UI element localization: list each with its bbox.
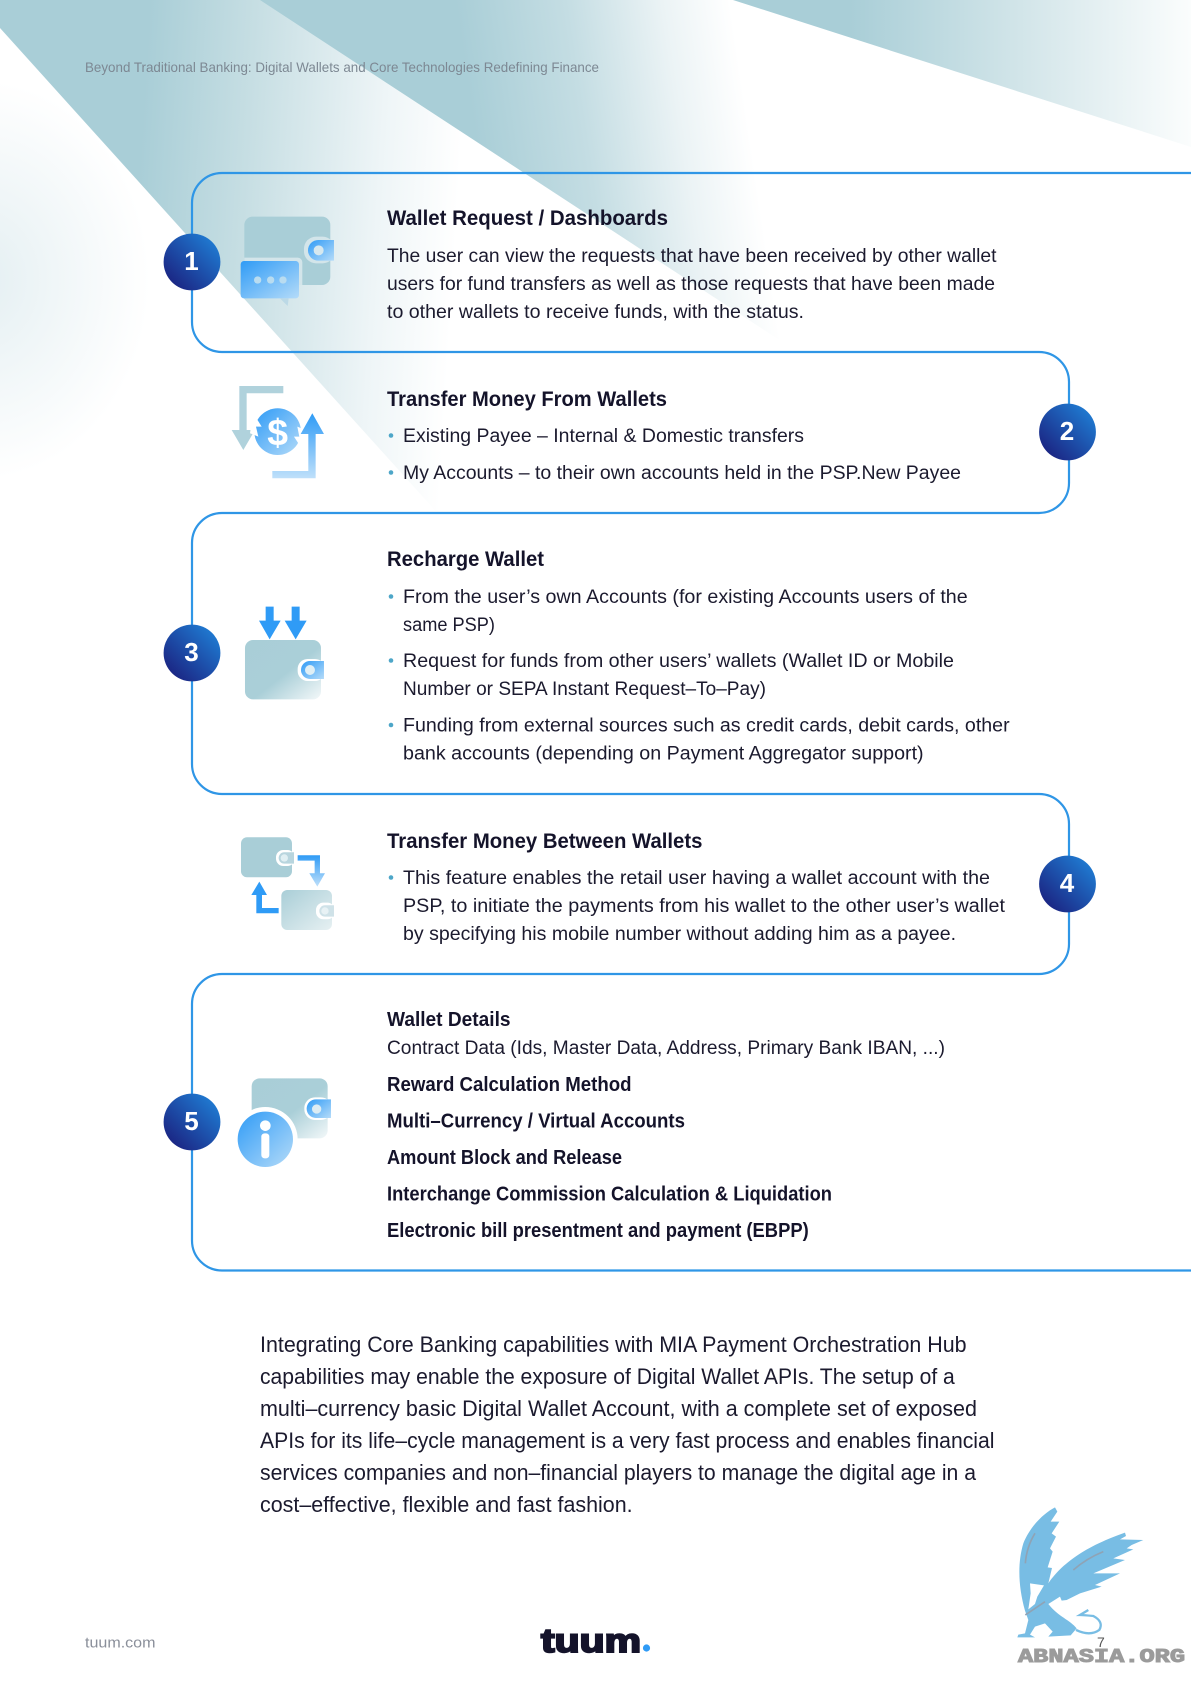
number badge 1 — [164, 234, 220, 290]
closing paragraph: Integrating Core Banking capabilities with MIA Payment Orchestration Hub — [260, 1332, 967, 1357]
closing paragraph: services companies and non–financial players to manage the digital age in a — [260, 1460, 976, 1485]
number badge 4 — [1039, 856, 1096, 912]
page number: 7 — [1097, 1634, 1105, 1650]
griffin watermark logo — [1017, 1507, 1143, 1637]
text: transfer money between wallets: Transfer Money Between Wallets — [387, 830, 702, 853]
panel 1: wallet request / dashboards — [164, 173, 1191, 352]
icon: wallet with chat bubble — [238, 217, 335, 306]
panel 3: recharge wallet — [164, 513, 1039, 794]
text: wallet request: users for fund transfers as well as those requests that have been made — [387, 273, 995, 295]
text: recharge wallet: From the user’s own Accounts (for existing Accounts users of the — [403, 586, 968, 608]
text: recharge wallet: Number or SEPA Instant Request–To–Pay) — [403, 678, 766, 700]
number badge 4: 4 — [1060, 868, 1075, 898]
text: transfer money between wallets: by specifying his mobile number without adding him as a payee. — [403, 923, 956, 945]
text: wallet request: to other wallets to receive funds, with the status. — [387, 301, 804, 323]
text: transfer money between wallets: This feature enables the retail user having a wallet account with the — [403, 867, 990, 889]
text: wallet request — [387, 207, 997, 323]
text: wallet details: Contract Data (Ids, Master Data, Address, Primary Bank IBAN, ...) — [387, 1037, 945, 1059]
number badge 2: 2 — [1060, 416, 1074, 446]
text: wallet details — [387, 1009, 945, 1242]
tuum logo: tuum — [541, 1622, 641, 1659]
text: wallet details: Wallet Details — [387, 1009, 510, 1031]
panel 2: transfer money from wallets — [222, 352, 1096, 513]
number badge 5 — [164, 1094, 220, 1150]
watermark text: ABNASIA.ORG — [1018, 1646, 1185, 1668]
panel 4: transfer money between wallets — [222, 794, 1096, 974]
text: transfer money from wallets — [387, 388, 961, 484]
text: wallet details: Multi–Currency / Virtual Accounts — [387, 1110, 685, 1132]
number badge 3: 3 — [184, 637, 199, 667]
text: wallet details: Amount Block and Release — [387, 1147, 622, 1169]
number badge 1: 1 — [184, 246, 199, 276]
text: wallet details: Reward Calculation Method — [387, 1074, 632, 1096]
page header text: Beyond Traditional Banking: Digital Wallets and Core Technologies Redefining Finance — [85, 59, 599, 75]
number badge 2 — [1039, 404, 1096, 460]
icon: wallet with info badge — [233, 1078, 332, 1172]
closing paragraph: cost–effective, flexible and fast fashion. — [260, 1492, 633, 1517]
closing paragraph — [260, 1332, 994, 1517]
text: transfer money between wallets — [387, 830, 1006, 945]
text: transfer money from wallets: Existing Payee – Internal & Domestic transfers — [403, 425, 804, 447]
text: transfer money from wallets: Transfer Money From Wallets — [387, 388, 667, 411]
text: wallet request: Wallet Request / Dashboards — [387, 207, 668, 230]
text: recharge wallet: Request for funds from other users’ wallets (Wallet ID or Mobile — [403, 650, 954, 672]
text: recharge wallet: same PSP) — [403, 614, 495, 636]
icon: dollar transfer arrows — [232, 386, 324, 478]
text: wallet request: The user can view the requests that have been received by other wallet — [387, 245, 997, 267]
text: recharge wallet: Recharge Wallet — [387, 548, 544, 571]
number badge 3 — [164, 625, 220, 681]
text: transfer money between wallets: PSP, to initiate the payments from his wallet to the other user’s wallet — [403, 895, 1006, 917]
closing paragraph: multi–currency basic Digital Wallet Account, with a complete set of exposed — [260, 1396, 977, 1421]
closing paragraph: APIs for its life–cycle management is a very fast process and enables financial — [260, 1428, 994, 1453]
number badge 5: 5 — [184, 1106, 199, 1136]
text: wallet details: Interchange Commission Calculation & Liquidation — [387, 1184, 832, 1206]
panel 5: wallet details — [164, 974, 1191, 1270]
text: recharge wallet: Funding from external sources such as credit cards, debit cards, other — [403, 715, 1010, 737]
icon: wallet with down arrows — [245, 607, 325, 699]
closing paragraph: capabilities may enable the exposure of Digital Wallet APIs. The setup of a — [260, 1364, 955, 1389]
icon: dollar transfer arrows: $ — [267, 411, 288, 453]
text: wallet details: Electronic bill presentment and payment (EBPP) — [387, 1220, 809, 1242]
text: transfer money from wallets: My Accounts – to their own accounts held in the PSP.New Payee — [403, 462, 961, 484]
footer url: tuum.com — [85, 1634, 156, 1652]
icon: two wallets exchanging — [241, 837, 335, 930]
text: recharge wallet: bank accounts (depending on Payment Aggregator support) — [403, 743, 924, 765]
text: recharge wallet — [387, 548, 1010, 765]
